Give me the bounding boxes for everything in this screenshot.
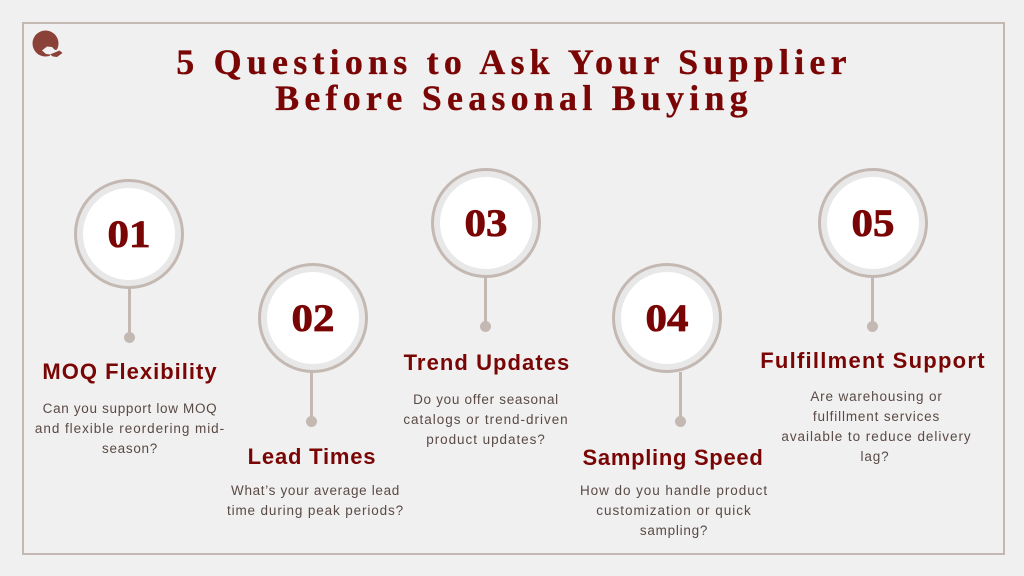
step 03 text: product updates? [426,432,546,447]
title [176,42,852,118]
step 03 text: catalogs or trend-driven [403,412,569,427]
step 02 text [227,444,404,518]
step 01 text: and flexible reordering mid- [35,421,225,436]
step 02 text: What’s your average lead [231,483,400,498]
step 03 marker: 03 [465,202,507,245]
step 04 text: How do you handle product [580,483,768,498]
step 05 text: lag? [860,449,890,464]
step 03 text [403,350,570,447]
icon: logo [32,30,62,57]
step 04 marker: 04 [646,297,688,340]
step 01 marker: 01 [108,213,150,256]
step 03 text: Do you offer seasonal [413,392,559,407]
step 04 text: Sampling Speed [583,445,763,470]
step 01 text: season? [102,441,158,456]
title: Before Seasonal Buying [275,78,753,118]
step 05 marker [818,168,928,332]
step 05 text: Fulfillment Support [760,348,986,373]
step 01 text [35,359,225,456]
step 03 marker [431,168,541,332]
step 04 marker [612,263,722,427]
step 02 text: time during peak periods? [227,503,404,518]
step 05 text: fulfillment services [813,409,940,424]
step 02 marker [258,263,368,427]
step 01 text: Can you support low MOQ [43,401,217,416]
step 04 text [580,445,768,538]
step 05 text [760,348,986,464]
step 02 marker: 02 [292,297,334,340]
step 05 text: Are warehousing or [810,389,943,404]
step 05 text: available to reduce delivery [781,429,972,444]
step 04 text: customization or quick [596,503,752,518]
step 01 marker [74,179,184,343]
step 04 text: sampling? [640,523,708,538]
step 01 text: MOQ Flexibility [42,359,218,384]
step 05 marker: 05 [852,202,894,245]
step 02 text: Lead Times [248,444,376,469]
title: 5 Questions to Ask Your Supplier [176,42,852,82]
step 03 text: Trend Updates [404,350,570,375]
